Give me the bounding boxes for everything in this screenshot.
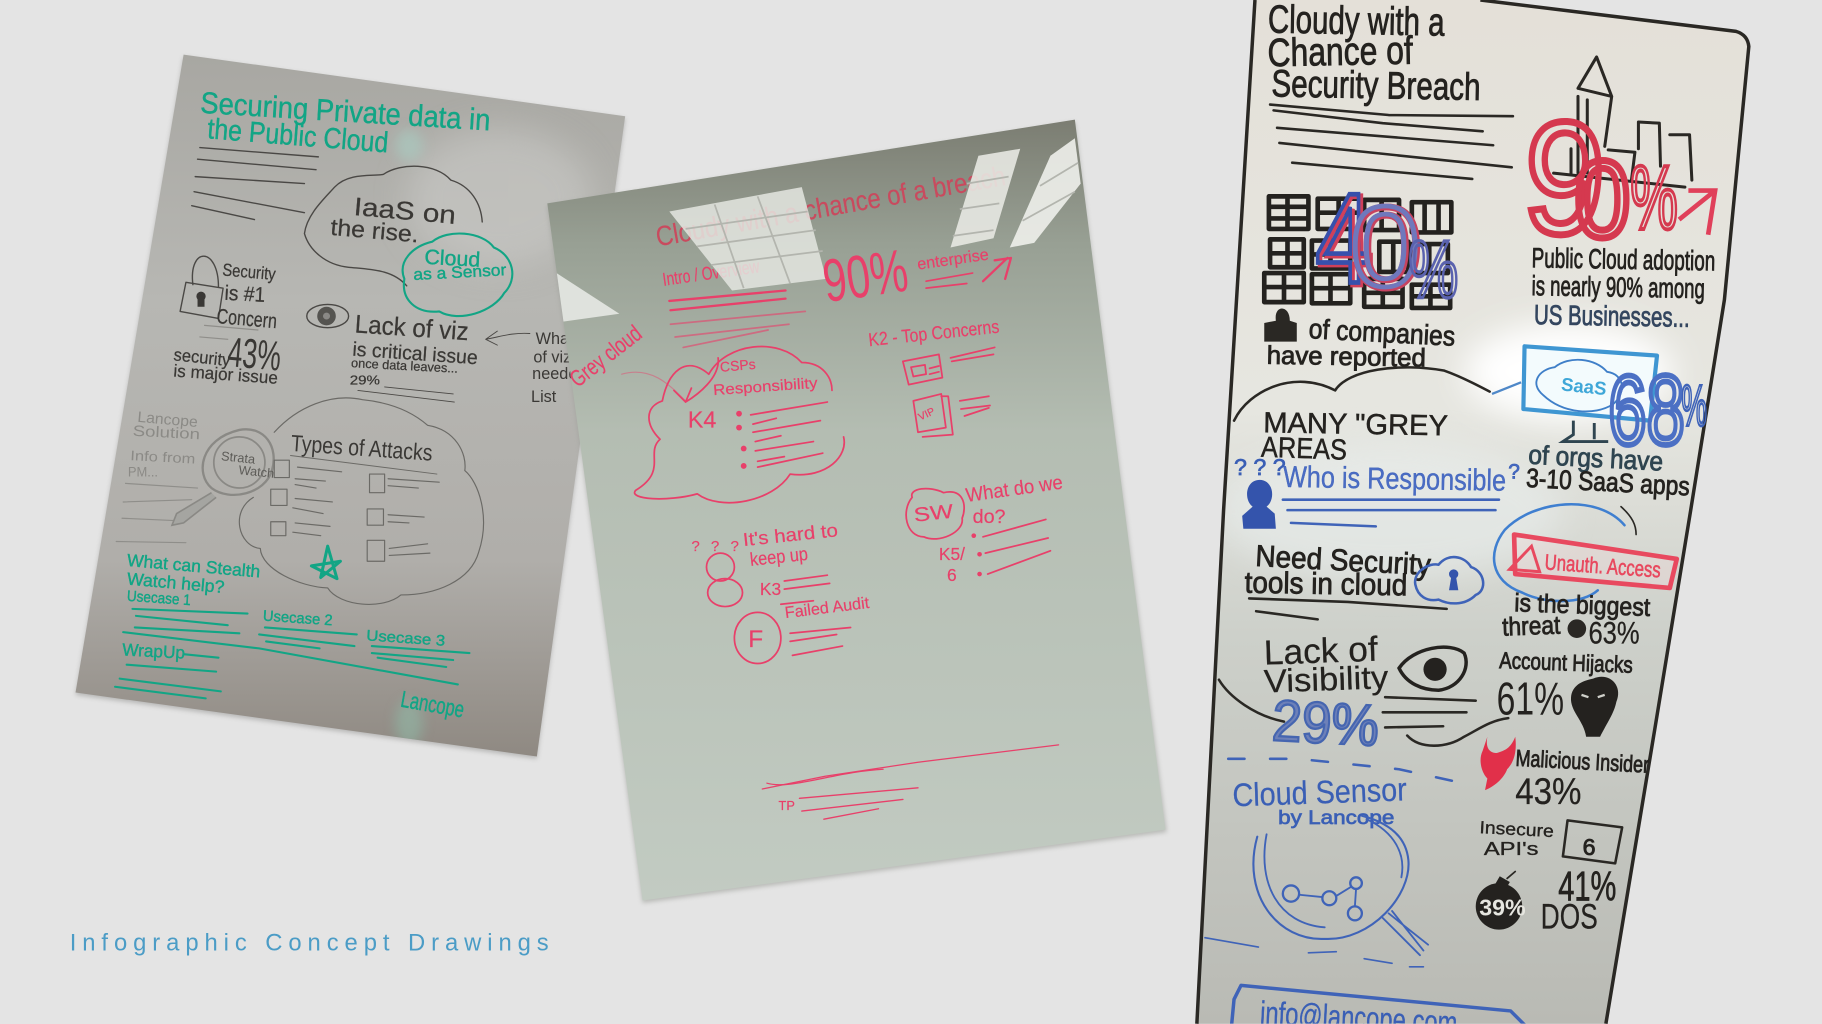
stat: account hijacks 61 percent: Account Hijacks — [1499, 647, 1633, 678]
heading: cloudy with a chance of a breach: Cloudy with a chance of a breach — [653, 160, 1008, 252]
callout: SW what do we do: do? — [973, 506, 1006, 528]
icon: F grade failed audit: F — [748, 626, 763, 653]
callout: SW what do we do: What do we — [964, 472, 1064, 507]
stat: 90 percent with arrow: 9 — [1519, 86, 1610, 269]
text: Lancope logo: Lancope — [399, 686, 466, 723]
heading: securing private data: the Public Cloud — [206, 113, 390, 159]
panel: black blue and red whiteboard sketch: % — [1681, 373, 1707, 438]
stat: malicious insider 43 percent: Malicious Insider — [1515, 745, 1650, 778]
text: faded Lancope solution: Info from — [130, 447, 196, 467]
icon: confused person with text: K3 — [760, 579, 781, 599]
contact box — [1232, 985, 1534, 1024]
text: who is responsible: ? — [1508, 461, 1520, 484]
stat: 40 percent: % — [1408, 224, 1458, 315]
stat: 43 percent security is major issue — [173, 328, 283, 388]
stat: DoS bomb 39 percent — [1476, 871, 1598, 936]
text: lack of viz: 29% — [350, 373, 380, 388]
icon: padlock — [180, 256, 223, 318]
icon: confused person with text: keep up — [749, 543, 809, 570]
arrow and side note: needed — [532, 365, 586, 383]
panel: many grey areas cloud outline: AREAS — [1261, 432, 1348, 467]
stat: 43 percent security is major issue: security — [173, 344, 232, 370]
stat: 40 percent: 4 — [1315, 167, 1371, 310]
heading: cloudy with a chance of security breach — [1267, 0, 1481, 109]
callout: SW what do we do: 6 — [947, 565, 957, 585]
panel: types of attacks cloud — [239, 398, 484, 604]
text: public cloud adoption: is nearly 90% among — [1531, 270, 1705, 304]
text: wrap up — [115, 632, 458, 698]
stat: insecure APIs 41 percent: 6 — [1583, 834, 1596, 860]
stat: malicious insider 43 percent: 43% — [1515, 770, 1581, 812]
icon: confused person with text: ? ? ? — [691, 538, 742, 555]
icon: F grade failed audit: Failed Audit — [784, 594, 871, 622]
stat: 43 percent security is major issue: is major issue — [173, 361, 279, 388]
icon: magnifier Strata Watch: Strata — [220, 448, 257, 467]
cloud base outline — [1219, 680, 1508, 746]
stat: 90 percent enterprise: enterprise — [916, 246, 990, 274]
callout: unauthorized access: Unauth. Access — [1544, 549, 1662, 582]
text: cloud sensor by Lancope: by Lancope — [1278, 807, 1394, 829]
icon: eye — [307, 304, 349, 328]
text: lack of visibility: Lack of — [1263, 630, 1379, 673]
stat: 43 percent security is major issue: 43% — [226, 328, 283, 380]
callout: IaaS on the rise cloud: the rise. — [330, 214, 420, 247]
text: use cases: Usecase 3 — [366, 627, 446, 650]
icon: magnifier Strata Watch — [172, 429, 275, 525]
text: what can Stealth Watch help: Watch help? — [126, 569, 226, 597]
icon: devil — [1481, 737, 1516, 790]
heading: cloudy with a chance of security breach: Chance of — [1267, 29, 1414, 75]
arrow and side note — [486, 330, 586, 406]
icon: city skyline — [1554, 57, 1692, 187]
text: lack of viz — [350, 310, 478, 402]
icon: magnifier Strata Watch: Watch — [238, 462, 275, 481]
text: what can Stealth Watch help: Usecase 1 — [126, 588, 191, 609]
stat: 40 percent: 0 — [1350, 184, 1420, 311]
arrow and side note: List — [531, 388, 557, 406]
stat: 90 percent enterprise: 90% — [819, 236, 912, 315]
heading: securing private data — [199, 87, 491, 159]
text: is the biggest threat 63 percent: is the biggest — [1514, 589, 1651, 622]
heading: securing private data: Securing Private data in — [199, 87, 491, 137]
text: K2 top concerns: VIP — [917, 406, 937, 423]
icon: small padlock — [1264, 309, 1297, 342]
text: faded Lancope solution — [116, 409, 200, 543]
icon: eye — [1399, 647, 1466, 690]
text: cloud sensor by Lancope: Cloud Sensor — [1232, 771, 1407, 813]
text: use cases — [259, 608, 469, 667]
text: lack of visibility: Visibility — [1263, 659, 1390, 700]
panel: green and black whiteboard sketch — [76, 55, 625, 759]
heading: cloudy with a chance of security breach: Security Breach — [1271, 62, 1481, 109]
callout: SW what do we do — [906, 472, 1064, 585]
text: lack of viz: once data leaves... — [351, 355, 458, 376]
callout: cloud as a sensor — [403, 233, 512, 316]
callout: IaaS on the rise cloud: IaaS on — [353, 193, 457, 230]
text: of companies have reported: have reported — [1266, 342, 1426, 372]
text: public cloud adoption: Public Cloud adoption — [1531, 242, 1716, 276]
panel: CSPs responsibility cloud: CSPs — [719, 356, 756, 375]
text: of orgs have SaaS apps — [1525, 440, 1691, 501]
text: cloud sensor by Lancope — [1232, 771, 1407, 829]
stat: account hijacks 61 percent — [1497, 647, 1633, 737]
icon: F grade failed audit — [734, 594, 871, 664]
stat: account hijacks 61 percent: 61% — [1497, 673, 1564, 725]
icon: confused person with text: It's hard to — [742, 519, 839, 550]
text: of orgs have SaaS apps: 3-10 SaaS apps — [1525, 463, 1691, 501]
intro text lines — [192, 148, 318, 220]
text: what can Stealth Watch help: What can Stealth — [126, 550, 261, 582]
stat: DoS bomb 39 percent: DOS — [1541, 897, 1598, 936]
stat: 90 percent with arrow: 0 — [1575, 139, 1630, 261]
text: is the biggest threat 63 percent: threat — [1502, 612, 1561, 642]
text: is the biggest threat 63 percent: 63% — [1588, 616, 1640, 651]
text: K2 top concerns — [867, 316, 1000, 437]
text: of orgs have SaaS apps: of orgs have — [1528, 440, 1664, 477]
stat: 68 percent: 68 — [1608, 355, 1685, 465]
text: use cases: Usecase 2 — [262, 608, 333, 629]
dashed divider — [1228, 759, 1452, 781]
footer notes — [762, 745, 1059, 819]
panel: CSPs responsibility cloud: Responsibility — [713, 375, 819, 399]
callout: cloud as a sensor: Cloud — [424, 246, 481, 272]
stat: malicious insider 43 percent — [1515, 745, 1650, 812]
icon: SaaS monitor — [1523, 346, 1657, 442]
stat: 40 percent: 4 — [1318, 170, 1373, 313]
callout: IaaS on the rise cloud — [304, 166, 482, 286]
text: public cloud adoption: US Businesses... — [1534, 299, 1690, 333]
icon: confused person with text — [691, 519, 839, 607]
text: lack of viz: Lack of viz — [354, 310, 470, 346]
stat: 90 percent with arrow — [1519, 86, 1715, 269]
text: wrap up: WrapUp — [122, 639, 186, 663]
text: who is responsible: ? ? ? — [1234, 454, 1286, 480]
icon: grid of buildings — [1264, 196, 1451, 308]
board frame — [1197, 0, 1749, 1024]
stat: insecure APIs 41 percent: Insecure — [1479, 817, 1554, 841]
text: what can Stealth Watch help — [126, 550, 261, 633]
text: faded Lancope solution: Lancope — [137, 409, 198, 431]
panel: black blue and red whiteboard sketch — [1197, 0, 1749, 1024]
callout: unauthorized access — [1494, 504, 1677, 601]
callout: cloud as a sensor: as a Sensor — [413, 261, 507, 284]
text: lack of visibility — [1263, 630, 1390, 700]
caption: Infographic Concept Drawings — [70, 930, 555, 957]
panel: many grey areas cloud outline: MANY "GREY — [1263, 407, 1448, 442]
text: need security tools in cloud — [1244, 540, 1483, 619]
footer notes: TP — [779, 798, 795, 813]
stat: insecure APIs 41 percent: 41% — [1558, 863, 1616, 910]
stat: insecure APIs 41 percent: API's — [1484, 838, 1538, 859]
text: need security tools in cloud: tools in cloud — [1244, 567, 1408, 602]
callout: SW what do we do: K5/ — [939, 544, 965, 564]
panel: CSPs responsibility cloud — [622, 347, 844, 503]
stat: 29 percent: 29% — [1271, 688, 1381, 759]
panel: many grey areas cloud outline — [1234, 367, 1521, 467]
text: who is responsible: Who is Responsible — [1283, 461, 1506, 498]
text: intro overview lines — [661, 255, 805, 347]
panel: red marker whiteboard sketch — [547, 120, 1167, 903]
callout: SW what do we do: SW — [913, 501, 955, 527]
icon: green star — [311, 546, 340, 579]
text: is the biggest threat 63 percent — [1502, 589, 1651, 651]
icon: SaaS monitor: SaaS — [1560, 374, 1608, 399]
text: K2 top concerns: K2 - Top Concerns — [867, 316, 1000, 350]
stat: 29 percent — [1271, 688, 1476, 759]
panel: CSPs responsibility cloud: K4 — [688, 407, 716, 433]
text: public cloud adoption — [1531, 242, 1716, 333]
stat: 90 percent enterprise — [819, 236, 1011, 315]
text: of companies have reported: of companies — [1308, 313, 1456, 352]
text: security is number one concern — [200, 259, 278, 339]
stat: 90 percent with arrow: % — [1630, 148, 1678, 249]
panel: types of attacks cloud: Types of Attacks — [290, 430, 433, 466]
text: security is number one concern: Concern — [216, 305, 278, 333]
ceiling light reflections — [557, 138, 1081, 322]
text: lack of viz: is critical issue — [352, 339, 478, 369]
text: security is number one concern: is #1 — [224, 282, 266, 307]
stat: insecure APIs 41 percent — [1479, 817, 1622, 910]
text: need security tools in cloud: Need Security — [1255, 540, 1432, 582]
arrow and side note: of viz — [533, 349, 571, 367]
intro text lines — [1270, 105, 1513, 179]
text: faded Lancope solution: Solution — [132, 423, 200, 443]
stat: DoS bomb 39 percent: 39% — [1479, 895, 1526, 921]
text: who is responsible — [1234, 454, 1520, 529]
icon: magnifier with network — [1205, 816, 1428, 967]
stat: 40 percent — [1315, 167, 1458, 315]
text: security is number one concern: Security — [222, 259, 277, 284]
arrow and side note: What — [536, 330, 574, 348]
text: intro overview lines: Intro / Overview — [661, 255, 761, 290]
text: grey cloud: Grey cloud — [565, 320, 647, 392]
stat: 40 percent: 0 — [1351, 185, 1421, 312]
text: of companies have reported — [1266, 313, 1456, 372]
text: faded Lancope solution: PM... — [128, 463, 158, 479]
